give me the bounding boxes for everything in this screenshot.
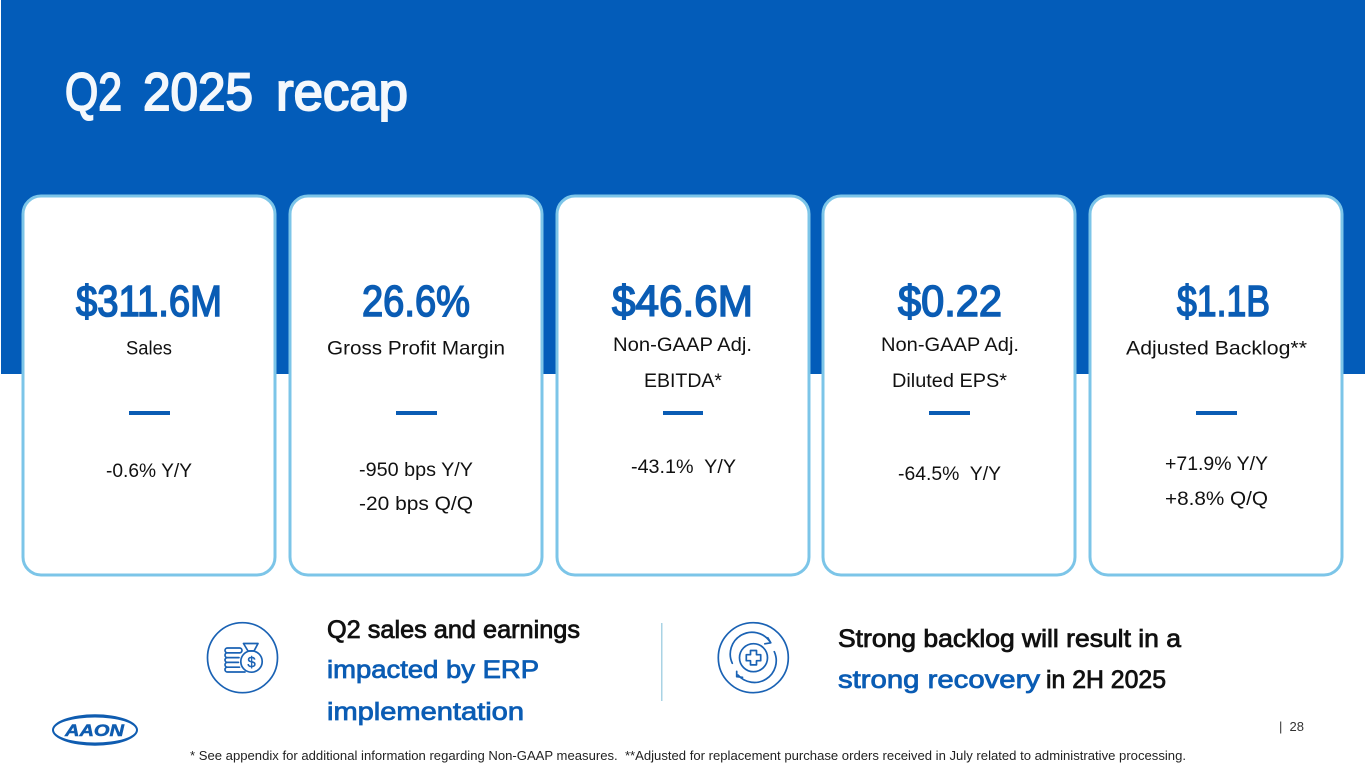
- EBITDA value: $46.6M: [612, 277, 753, 326]
- EPS value: $0.22: [898, 277, 1002, 326]
- backlog value: $1.1B: [1177, 277, 1270, 326]
- EPS change: -64.5% Y/Y: [898, 463, 1001, 485]
- EBITDA label: EBITDA*: [644, 370, 722, 392]
- text: backlog recovery: Strong backlog will result in a: [838, 625, 1181, 653]
- logo: AAON: AAON: [64, 722, 125, 740]
- backlog label: Adjusted Backlog**: [1126, 338, 1307, 360]
- margin label: Gross Profit Margin: [327, 338, 505, 360]
- text: backlog recovery: [838, 625, 1181, 694]
- page number: | 28: [1279, 719, 1304, 734]
- title: recap: [276, 63, 408, 122]
- title: Q2: [65, 63, 122, 122]
- sales value: $311.6M: [76, 277, 222, 326]
- title: [65, 63, 408, 122]
- margin change: -950 bps Y/Y: [359, 459, 473, 481]
- footnote: * See appendix for additional information regarding Non-GAAP measures. **Adjusted for replacement purchase orders received in July related to administrative processing.: [190, 748, 1186, 763]
- EPS label: Diluted EPS*: [892, 370, 1007, 392]
- text: backlog recovery: in 2H 2025: [1046, 666, 1166, 694]
- EBITDA label: Non-GAAP Adj.: [613, 334, 752, 356]
- backlog change: +8.8% Q/Q: [1165, 488, 1268, 510]
- panel: adjusted diluted EPS: [823, 196, 1075, 575]
- sales label: Sales: [126, 338, 172, 360]
- text: sales and earnings impact: implementation: [327, 698, 524, 726]
- backlog change: +71.9% Y/Y: [1165, 453, 1268, 475]
- margin change: [359, 459, 473, 515]
- blue header band: [1, 0, 1365, 374]
- text: backlog recovery: strong recovery: [838, 666, 1041, 694]
- title: 2025: [143, 63, 253, 122]
- margin value: 26.6%: [362, 277, 470, 326]
- panel: adjusted EBITDA: [557, 196, 809, 575]
- icon: money bag and coins: [208, 623, 278, 693]
- panel: adjusted backlog: [1090, 196, 1342, 575]
- EBITDA label: [613, 334, 752, 392]
- logo: AAON: [52, 714, 138, 746]
- EPS label: Non-GAAP Adj.: [881, 334, 1019, 356]
- sales change: -0.6% Y/Y: [106, 460, 192, 482]
- icon: recovery cycle with medical cross: [718, 623, 788, 693]
- EPS label: [881, 334, 1019, 392]
- text: sales and earnings impact: Q2 sales and earnings: [327, 616, 580, 644]
- EBITDA change: -43.1% Y/Y: [631, 456, 736, 478]
- margin change: -20 bps Q/Q: [359, 493, 473, 515]
- panel: sales: [23, 196, 275, 575]
- backlog change: [1165, 453, 1268, 510]
- panel: gross profit margin: [290, 196, 542, 575]
- icon: money bag and coins: $: [247, 654, 256, 671]
- text: sales and earnings impact: [327, 616, 580, 726]
- text: sales and earnings impact: impacted by ERP: [327, 656, 539, 684]
